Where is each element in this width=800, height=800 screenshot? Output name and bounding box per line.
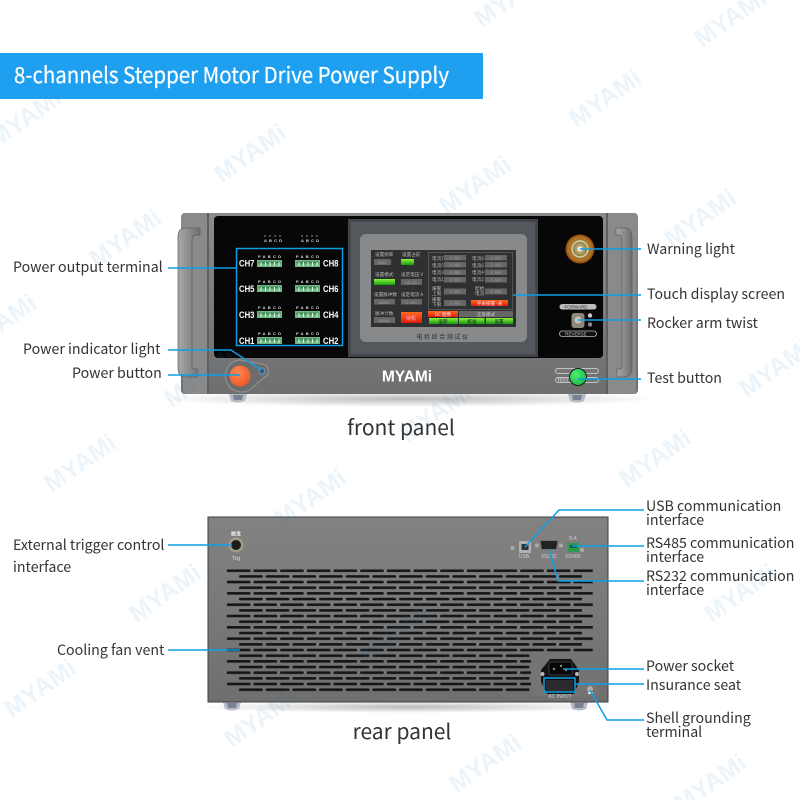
- touch screen: 设定电流 A: [401, 291, 423, 298]
- rear panel device: [198, 517, 618, 713]
- touch screen: 8. 888: [491, 289, 502, 295]
- watermarks: MYAMi: [0, 654, 82, 723]
- callouts right front: [513, 239, 785, 388]
- touch screen: 88888: [378, 318, 390, 323]
- touch screen: 设置模式: [375, 271, 394, 278]
- label: RS232 communication interface: interface: [646, 580, 704, 600]
- channel rows: PABCD: [258, 279, 281, 284]
- display bezel: 电机综合测试仪: [416, 332, 470, 341]
- touch screen: [371, 250, 516, 327]
- label: USB communication interface: USB communication: [646, 496, 781, 516]
- channel rows: PABCD: [258, 254, 281, 259]
- touch screen: 正反模式: [477, 311, 496, 318]
- touch screen: 报警: [432, 296, 442, 303]
- label: shell grounding terminal: terminal: [646, 722, 702, 742]
- top connector markers: ABCD: [264, 238, 282, 243]
- cooling vents: [227, 569, 593, 693]
- power button and indicator: [225, 360, 268, 392]
- front chassis: [181, 213, 638, 394]
- label: RS485 communication interface: RS485 communication: [646, 533, 794, 553]
- trigger connector: Trig: [232, 556, 240, 562]
- touch screen: 设置脉冲数: [374, 291, 397, 298]
- watermarks: MYAMi: [159, 344, 242, 413]
- touch screen: 8. 888: [491, 278, 502, 284]
- rear feet: [223, 702, 588, 710]
- label: RS232 communication interface: RS232 communication: [646, 566, 794, 586]
- RS232 port: RS232: [541, 554, 557, 560]
- touch screen: 8. 888: [491, 256, 502, 262]
- channel rows: CH2: [323, 336, 338, 346]
- channel rows: CH8: [323, 258, 338, 268]
- brand logo: MYAMi: [382, 368, 432, 386]
- label: rocker arm twist: Rocker arm twist: [647, 313, 759, 333]
- label: external trigger control interface: [13, 535, 232, 577]
- trigger connector: [228, 530, 244, 562]
- touch screen: 设定电压 V: [401, 271, 423, 278]
- watermarks: MYAMi: [354, 599, 437, 668]
- touch screen: 电流: [475, 290, 485, 297]
- trigger connector: 触发: [231, 530, 241, 538]
- label: power output terminal: Power output terminal: [13, 257, 163, 277]
- label: insurance seat: Insurance seat: [646, 675, 742, 695]
- touch screen: 设置频率: [375, 251, 394, 258]
- top connector markers: [264, 235, 319, 243]
- watermarks: MYAMi: [39, 429, 122, 498]
- front panel caption: front panel: [347, 412, 455, 442]
- watermarks: MYAMi: [444, 729, 527, 798]
- channel rows: CH7: [239, 258, 254, 268]
- channel rows: PABCD: [296, 279, 319, 284]
- label: power socket: Power socket: [646, 656, 735, 676]
- callouts left front: [13, 257, 261, 383]
- touch screen: 8. 888: [491, 262, 502, 268]
- touch screen: 电流1: [432, 276, 444, 283]
- watermarks: MYAMi: [394, 379, 477, 448]
- rocker switch: REVERSE: [565, 332, 587, 336]
- touch screen: 电流5: [432, 262, 444, 269]
- label: cooling fan vent: Cooling fan vent: [57, 640, 165, 660]
- RS232 port: [535, 540, 563, 560]
- label: warning light: Warning light: [647, 239, 736, 259]
- touch screen: DC 图像: [435, 311, 452, 318]
- watermarks: MYAMi: [614, 424, 697, 493]
- label: external trigger control interface: interface: [13, 557, 71, 577]
- channel rows: PABCD: [296, 254, 319, 259]
- touch screen: 上限: [432, 290, 442, 297]
- channel rows: PABCD: [258, 331, 281, 336]
- channel rows: [239, 254, 338, 346]
- callouts left rear: [13, 535, 240, 660]
- label: power indicator light: [23, 339, 261, 370]
- channel rows: PABCD: [296, 305, 319, 310]
- touch screen: 8. 888: [491, 270, 502, 276]
- touch screen: 设置: [494, 318, 504, 325]
- touch screen: 8888: [378, 260, 387, 265]
- RS485 port: RS485: [565, 554, 581, 560]
- rocker switch: FORWARD: [564, 304, 588, 310]
- channel rows: PABCD: [258, 305, 281, 310]
- header banner: [0, 53, 483, 99]
- watermarks: MYAMi: [659, 184, 742, 253]
- power socket: [540, 659, 579, 700]
- touch screen: 8. 888: [450, 256, 461, 262]
- touch screen: 下限: [432, 301, 442, 308]
- grounding screw: [587, 686, 593, 694]
- left handle: [178, 228, 200, 377]
- touch screen: 待机: [406, 315, 416, 322]
- touch screen: 脉冲计数: [375, 310, 394, 317]
- label: external trigger control interface: External trigger control: [13, 535, 164, 555]
- callouts right rear: [525, 496, 794, 742]
- right handle: [616, 228, 632, 377]
- display bezel: [348, 219, 538, 357]
- touch screen: 8. 888: [450, 278, 461, 284]
- channel rows: CH1: [239, 336, 254, 346]
- touch screen: 8. 888: [405, 300, 417, 305]
- rocker switch: [560, 304, 596, 336]
- touch screen: 校准: [467, 318, 477, 325]
- RS485 port: [565, 536, 584, 560]
- touch screen: 8. 888: [450, 262, 461, 268]
- power socket: AC INPUT: [548, 694, 572, 700]
- USB port: USB: [519, 554, 530, 560]
- touch screen: 8. 888: [450, 300, 461, 306]
- header banner: 8-channels Stepper Motor Drive Power Supply: [14, 58, 449, 90]
- touch screen: 电流4: [472, 269, 484, 276]
- label: RS485 communication interface: interface: [646, 547, 704, 567]
- watermarks: MYAMi: [84, 204, 167, 273]
- watermarks: MYAMi: [219, 684, 302, 753]
- black control panel: [214, 216, 603, 358]
- rear chassis: [208, 517, 608, 702]
- touch screen: 8. 888: [450, 270, 461, 276]
- channel rows: PABCD: [296, 331, 319, 336]
- touch screen: 设置占前: [402, 251, 421, 258]
- label: RS232 communication interface: [549, 549, 794, 600]
- test button: TEST: [557, 378, 569, 382]
- top connector markers: ABCD: [301, 238, 319, 243]
- USB port: [510, 541, 531, 560]
- label: USB communication interface: [525, 496, 781, 547]
- label: shell grounding terminal: [590, 690, 751, 742]
- front feet: [229, 394, 586, 402]
- touch screen: 88888: [378, 300, 390, 305]
- touch screen: 起始: [475, 285, 485, 292]
- watermarks: MYAMi: [564, 64, 647, 133]
- touch screen: 开关报警 -关: [477, 300, 503, 307]
- touch screen: 报警: [432, 285, 442, 292]
- watermarks: MYAMi: [124, 559, 207, 628]
- watermarks: MYAMi: [699, 559, 782, 628]
- touch screen: 电流7: [432, 255, 444, 262]
- label: power button: Power button: [72, 363, 162, 383]
- label: power indicator light: Power indicator light: [23, 339, 161, 359]
- touch screen: 8. 888: [450, 289, 461, 295]
- channel rows: CH3: [239, 310, 254, 320]
- test button: [556, 368, 598, 386]
- touch screen: 电流2: [472, 276, 484, 283]
- touch screen: 电流8: [472, 255, 484, 262]
- label: test button: Test button: [647, 368, 722, 388]
- watermarks: MYAMi: [434, 151, 517, 220]
- RS485 port: B A: [569, 536, 578, 542]
- watermarks: MYAMi: [209, 119, 292, 188]
- touch screen: 电流6: [472, 262, 484, 269]
- touch screen: 电流3: [432, 269, 444, 276]
- warning light: [566, 234, 594, 264]
- label: shell grounding terminal: Shell grounding: [646, 708, 751, 728]
- label: touch display screen: Touch display screen: [647, 284, 785, 304]
- label: USB communication interface: interface: [646, 510, 704, 530]
- power output terminals: [236, 248, 342, 346]
- label: RS485 communication interface: [572, 533, 794, 567]
- channel rows: CH6: [323, 284, 338, 294]
- rear panel caption: rear panel: [353, 716, 451, 746]
- channel rows: CH4: [323, 310, 338, 320]
- channel rows: CH5: [239, 284, 254, 294]
- watermarks: MYAMi: [269, 464, 352, 533]
- label: insurance seat: [544, 675, 742, 695]
- touch screen: 88. 88: [405, 280, 417, 285]
- touch screen: 运转: [438, 318, 448, 325]
- front panel device: [158, 213, 658, 407]
